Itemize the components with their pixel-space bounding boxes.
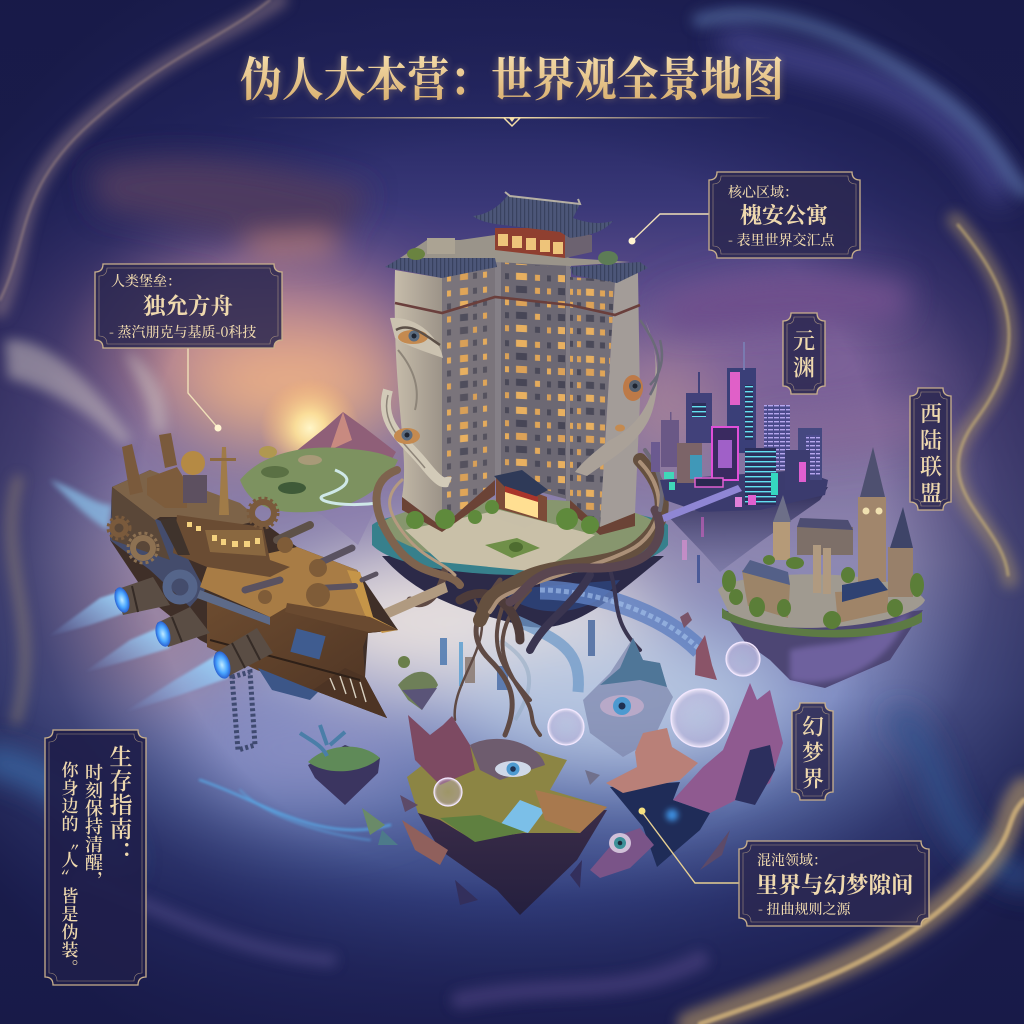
ship silhouette (110, 470, 398, 718)
keel blue (258, 668, 318, 700)
superstructure (173, 515, 290, 577)
base (402, 480, 495, 532)
keel vents (313, 668, 387, 718)
center face (495, 257, 570, 500)
right island slab (606, 728, 698, 793)
stern wall (112, 487, 170, 560)
city underside (665, 487, 828, 572)
title underline (250, 117, 774, 126)
label: 人类堡垒 (95, 264, 282, 348)
blue jet streak (50, 480, 112, 530)
parapet (400, 235, 630, 266)
shards (362, 770, 730, 905)
funnels (122, 433, 177, 495)
roof gardens (407, 248, 425, 260)
cloud streaks (90, 157, 950, 460)
central island top (407, 740, 607, 840)
dome and mast (181, 447, 236, 515)
lower deck (200, 547, 373, 617)
left window face (442, 263, 495, 527)
label: 人类堡垒: 独允方舟 (143, 289, 233, 321)
airship: 独允方舟 (47, 433, 398, 750)
right stucco face (600, 273, 640, 527)
data streams (500, 590, 700, 720)
label: 元渊: 元渊 (788, 329, 820, 383)
leader: 混沌领域 (638, 808, 739, 883)
cabin (147, 467, 187, 508)
gothic buildings (742, 447, 913, 623)
label: 混沌领域: 混沌领域： (757, 850, 827, 870)
sun (260, 378, 360, 478)
towers (651, 342, 822, 507)
city platform (660, 470, 828, 512)
label: 混沌领域: - 扭曲规则之源 (758, 899, 852, 919)
chaos islands: 里界与幻梦 (300, 612, 783, 915)
leader: 核心区域 (628, 214, 709, 244)
label: 人类堡垒: 人类堡垒： (111, 271, 181, 291)
right window face (570, 277, 615, 527)
callout: 生存指南: 你身边的〝人〟皆是伪装。 (58, 761, 82, 977)
neon bridge (662, 485, 742, 522)
shrubs (406, 500, 599, 534)
leader: 人类堡垒 (188, 348, 222, 432)
ladder (232, 672, 255, 750)
label: 幻梦界 (792, 703, 833, 800)
island rim (372, 506, 668, 575)
left stucco face (395, 270, 442, 527)
label: 核心区域: - 表里世界交汇点 (728, 230, 836, 250)
hanging roots (410, 570, 640, 735)
blue band (197, 590, 270, 625)
hanging banners (440, 620, 595, 690)
callout: 生存指南: 时刻保持清醒， (81, 763, 107, 889)
building island with roots (372, 499, 700, 735)
label: 元渊 (783, 313, 825, 394)
entrance (490, 470, 548, 528)
chimney smoke (5, 340, 166, 445)
west island underside (722, 610, 923, 688)
bow trim (347, 570, 398, 633)
cannon mounts (258, 537, 330, 607)
roots wrapping the tower (376, 450, 662, 620)
label: 核心区域 (709, 172, 860, 258)
hatch (290, 629, 326, 659)
coral islet (300, 725, 380, 805)
cyber city: 元渊 (651, 342, 828, 583)
gothic city: 西陆联盟 (718, 447, 925, 688)
left island with mountain and river (240, 412, 398, 545)
right island underside (610, 782, 710, 867)
pagoda (473, 192, 613, 258)
upper deck (112, 470, 260, 533)
rear machinery (110, 500, 205, 607)
label: 幻梦界: 幻梦界 (798, 715, 828, 793)
label: 混沌领域: 里界与幻梦隙间 (756, 868, 914, 900)
rope bridge (375, 582, 448, 622)
label: 核心区域: 核心区域： (728, 182, 798, 202)
callout: 生存指南 (45, 730, 146, 985)
hull wood (207, 597, 398, 718)
central island underside (418, 810, 607, 915)
label: 西陆联盟 (910, 388, 951, 510)
eye rock (583, 638, 673, 757)
floor band (395, 297, 640, 315)
label: 核心区域: 槐安公寓 (740, 199, 828, 230)
label: 西陆联盟: 西陆联盟 (916, 402, 946, 508)
eye rock bottom (590, 828, 654, 878)
title: 伪人大本营：世界观全景地图 (240, 43, 784, 110)
floating rocks (695, 635, 717, 680)
callout: 生存指南: 生存指南： (104, 745, 138, 865)
label: 人类堡垒: - 蒸汽朋克与基质-0科技 (109, 322, 256, 342)
stairs (160, 517, 190, 555)
building faces: eyes and wrinkles (386, 318, 662, 482)
bubbles (434, 642, 760, 806)
wing roofs (385, 258, 497, 278)
right island spires (673, 683, 783, 813)
gears (108, 498, 278, 600)
central spires (408, 715, 475, 785)
engines (112, 577, 273, 681)
tower: 槐安公寓 (385, 192, 662, 535)
cannons (245, 525, 376, 590)
west island top (718, 574, 925, 628)
label: 混沌领域 (739, 841, 929, 926)
tree islet (398, 656, 438, 710)
jet flames (47, 590, 228, 713)
trees (722, 555, 924, 629)
